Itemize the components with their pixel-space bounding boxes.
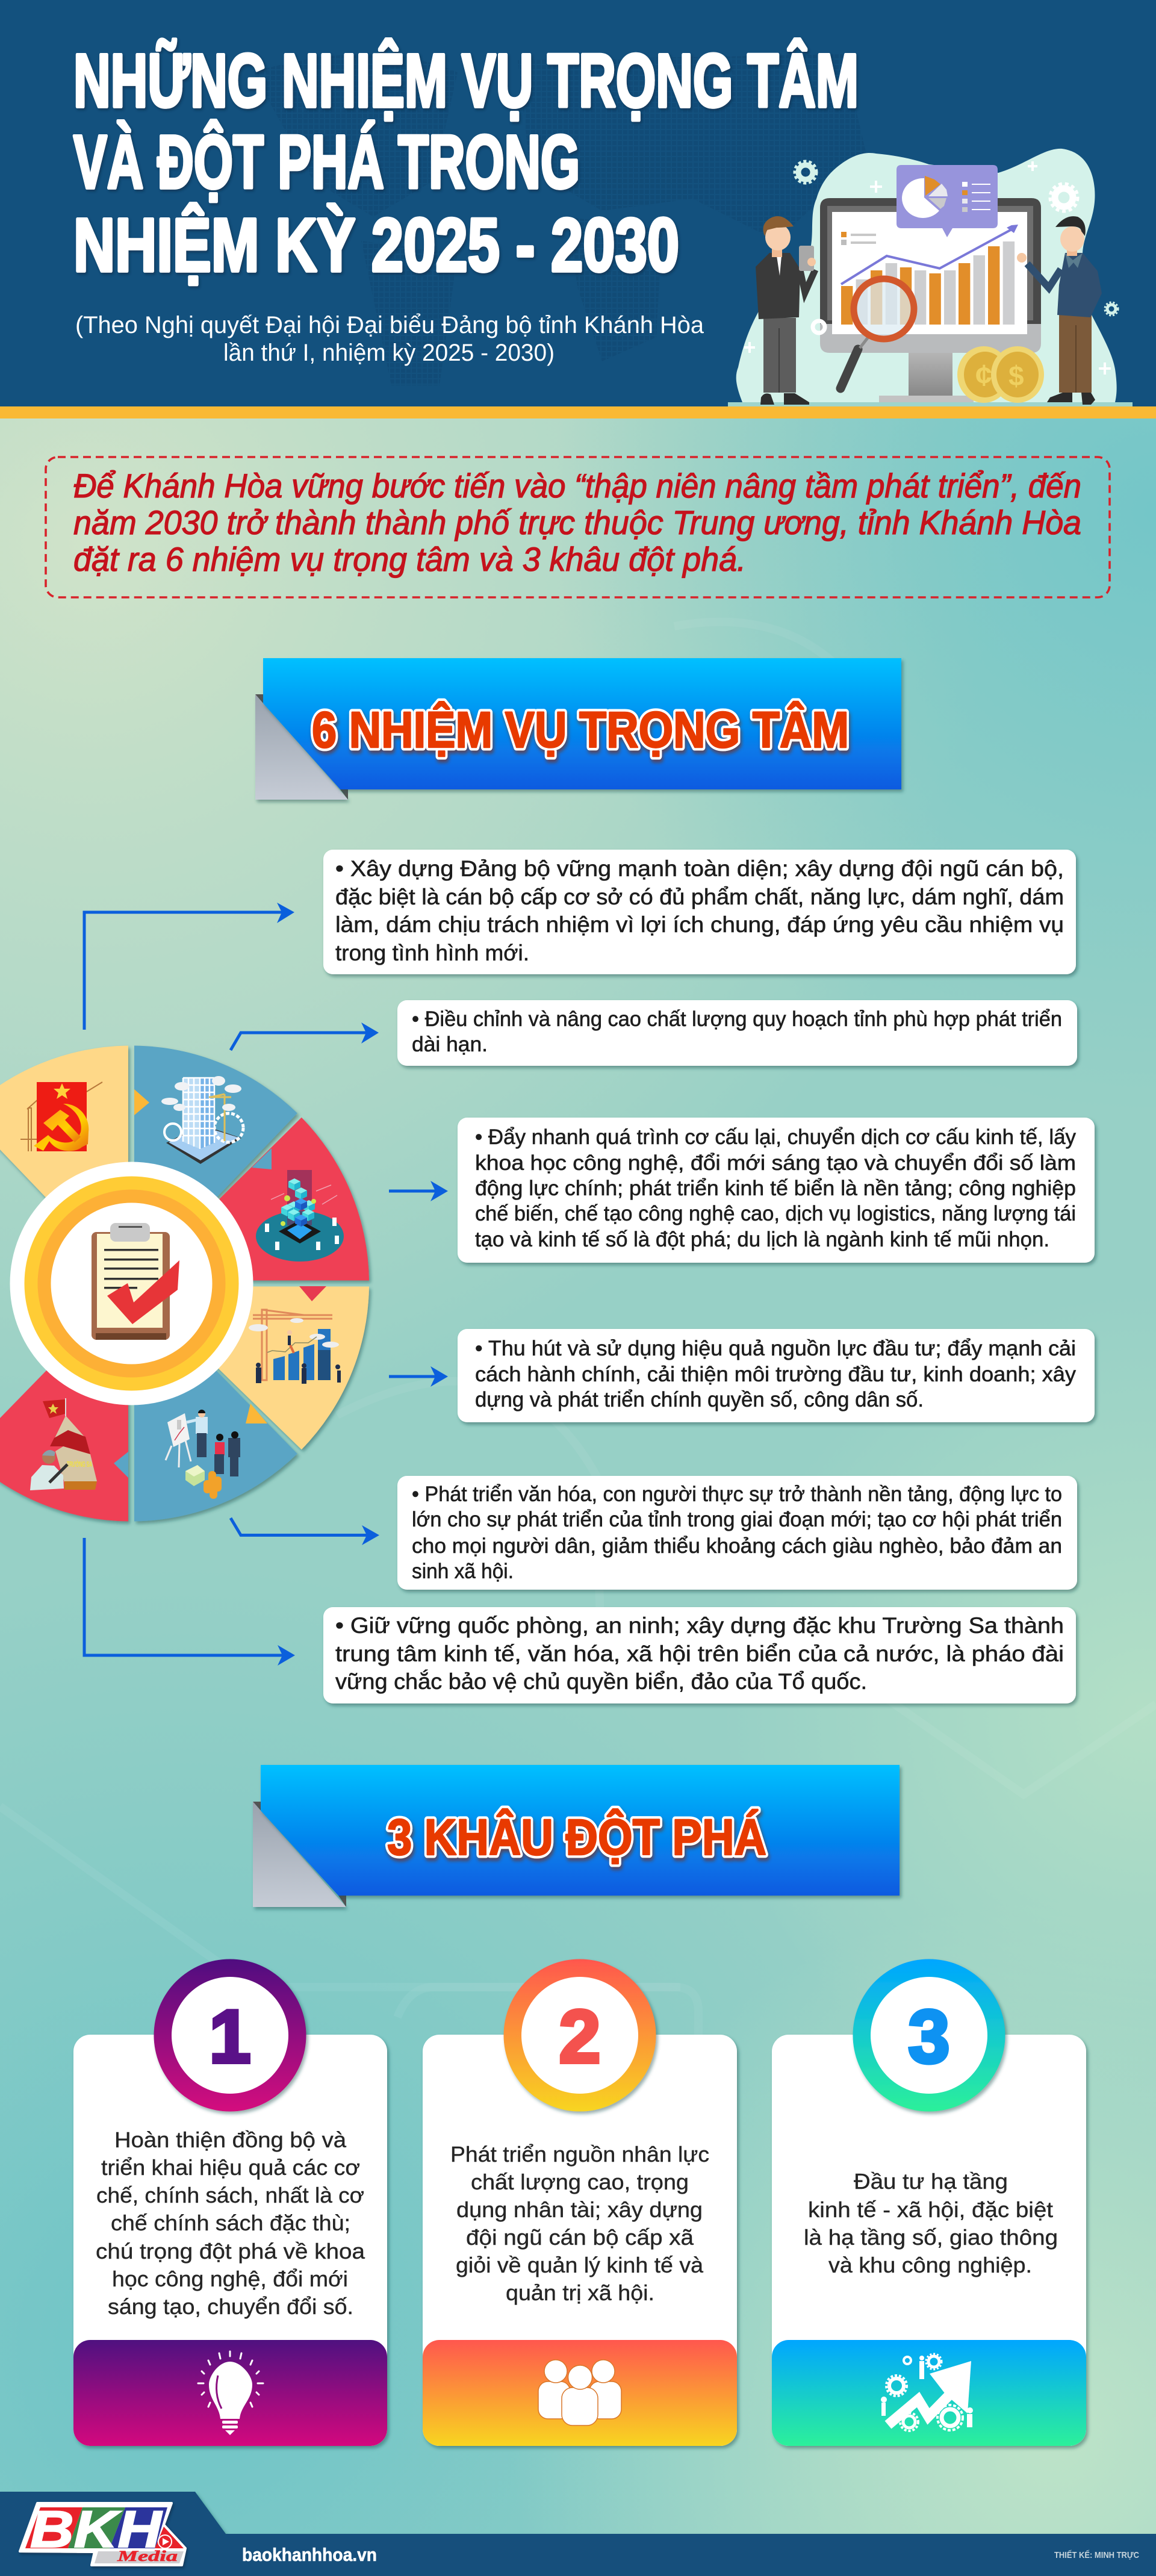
card 2	[423, 1959, 737, 2446]
sector: defence	[0, 1286, 128, 1521]
card 1 text: triển khai hiệu quả các cơ	[101, 2155, 360, 2180]
website: baokhanhhoa.vn	[242, 2544, 377, 2565]
text box 6: trung tâm kinh tế, văn hóa, xã hội trên biển của cả nước, là pháo đài	[335, 1641, 1064, 1666]
card 1 text: Hoàn thiện đồng bộ và	[114, 2127, 347, 2152]
connector arrow 5	[231, 1518, 379, 1545]
text box 2: • Điều chỉnh và nâng cao chất lượng quy hoạch tỉnh phù hợp phát triển	[412, 1007, 1062, 1031]
card 2 text: quản trị xã hội.	[506, 2280, 654, 2305]
monitor	[820, 198, 1041, 402]
decorative plus signs	[744, 161, 1111, 375]
icon: light bulb	[198, 2351, 263, 2435]
text box 1: làm, dám chịu trách nhiệm vì lợi ích chung, đáp ứng yêu cầu nhiệm vụ	[335, 912, 1064, 937]
connector arrow 3	[389, 1181, 448, 1201]
text box 5: lớn cho sự phát triển của tỉnh trong giai đoạn mới; tạo cơ hội phát triển	[412, 1508, 1062, 1531]
connector arrow 2	[231, 1022, 379, 1050]
man pointing	[1017, 216, 1102, 405]
text box 3: tạo và kinh tế số là đột phá; du lịch là ngành kinh tế mũi nhọn.	[475, 1228, 1049, 1251]
heading banner: 6 nhiệm vụ trọng tâm: 6 NHIỆM VỤ TRỌNG TÂM	[312, 702, 849, 758]
title	[73, 39, 859, 287]
number badge 2	[503, 1959, 656, 2111]
subtitle: (Theo Nghị quyết Đại hội Đại biểu Đảng bộ tỉnh Khánh Hòa	[75, 312, 704, 338]
text box 4: dựng và phát triển chính quyền số, công dân số.	[475, 1388, 924, 1411]
text box 6: • Giữ vững quốc phòng, an ninh; xây dựng đặc khu Trường Sa thành	[335, 1613, 1064, 1638]
number badge 1: 1	[210, 1996, 250, 2079]
footer	[0, 2492, 1156, 2576]
text box 2: dài hạn.	[412, 1033, 488, 1056]
icon: group of people	[538, 2360, 621, 2425]
decorative gears	[795, 161, 1118, 333]
text box 5	[397, 1476, 1077, 1590]
icon: digital chip platform	[256, 1170, 344, 1262]
card 1 text: chế chính sách đặc thù;	[111, 2210, 350, 2235]
card 2 text: chất lượng cao, trọng	[471, 2170, 689, 2194]
world map texture	[253, 54, 867, 385]
text box 5: cho mọi người dân, giảm thiểu khoảng cách giàu nghèo, bảo đảm an	[412, 1534, 1062, 1558]
text box 4: • Thu hút và sử dụng hiệu quả nguồn lực đầu tư; đẩy mạnh cải	[475, 1337, 1076, 1360]
connector arrow 6	[84, 1538, 295, 1666]
designer credit: THIẾT KẾ: MINH TRỰC	[1054, 2550, 1139, 2560]
text box 3: khoa học công nghệ, đổi mới sáng tạo và chuyển đổi số làm	[475, 1151, 1076, 1175]
text box 4	[458, 1329, 1095, 1422]
card 1 text	[96, 2127, 365, 2319]
text box 4: cách hành chính, cải thiện môi trường đầu tư, kinh doanh; xây	[475, 1363, 1077, 1386]
sector: investment	[134, 1286, 369, 1449]
text box 2	[397, 1000, 1077, 1066]
number badge 3: 3	[909, 1996, 949, 2079]
title: VÀ ĐỘT PHÁ TRONG	[73, 120, 580, 204]
text box 1: đặc biệt là cán bộ cấp cơ sở có đủ phẩm chất, năng lực, dám nghĩ, dám	[335, 885, 1064, 909]
text box 5: sinh xã hội.	[412, 1560, 514, 1583]
header panel	[0, 0, 1156, 406]
sector: party	[0, 1045, 128, 1284]
intro callout	[46, 457, 1110, 597]
connector arrow 4	[389, 1366, 448, 1387]
icon: Truong Sa monument with sailor: TRƯỜNG SA	[67, 1460, 92, 1469]
text box 1: trong tình hình mới.	[335, 941, 529, 965]
wheel diagram: six tasks	[0, 1045, 369, 1521]
heading banner: 6 nhiệm vụ trọng tâm	[255, 658, 901, 800]
card 3 text: kinh tế - xã hội, đặc biệt	[808, 2197, 1053, 2222]
card 1 text: sáng tạo, chuyển đổi số.	[108, 2294, 353, 2319]
intro callout: đặt ra 6 nhiệm vụ trọng tâm và 3 khâu đột phá.	[73, 540, 746, 578]
gold coins: ¢	[975, 358, 992, 392]
text box 3: động lực chính; phát triển kinh tế biển là nền tảng; công nghiệp	[475, 1177, 1076, 1200]
text box 6	[323, 1607, 1076, 1703]
icon: clipboard with check mark	[92, 1223, 179, 1340]
card 3 text: là hạ tầng số, giao thông	[804, 2225, 1058, 2250]
heading banner: 3 khâu đột phá: 3 KHÂU ĐỘT PHÁ	[387, 1809, 766, 1865]
sector: planning	[134, 1045, 297, 1284]
connector arrow 1	[84, 903, 294, 1030]
card 3 text: Đầu tư hạ tầng	[854, 2169, 1008, 2194]
speech bubble with pie chart	[897, 165, 998, 237]
intro callout: Để Khánh Hòa vững bước tiến vào “thập niên nâng tầm phát triển”, đến	[73, 467, 1081, 505]
icon: Truong Sa monument with sailor	[30, 1398, 97, 1490]
subtitle: lần thứ I, nhiệm kỳ 2025 - 2030)	[223, 340, 555, 366]
man with phone	[756, 216, 816, 405]
card 1 text: học công nghệ, đổi mới	[112, 2266, 348, 2291]
icon: tower under construction	[161, 1076, 243, 1164]
title: NHIỆM KỲ 2025 - 2030	[73, 204, 679, 287]
sector: culture and people	[134, 1286, 297, 1521]
card 3 footer with growth icon	[772, 2340, 1086, 2446]
card 1 text: chú trọng đột phá về khoa	[96, 2239, 365, 2263]
icon: team around flipchart with money	[166, 1410, 240, 1499]
bar chart	[841, 225, 1018, 325]
card 1	[73, 1959, 387, 2446]
text box 1	[323, 850, 1076, 974]
subtitle	[75, 312, 704, 366]
card 3 text: và khu công nghiệp.	[828, 2253, 1032, 2277]
card 1 footer with light bulb icon	[73, 2340, 387, 2446]
card 2 text	[450, 2142, 709, 2305]
text box 3: chế biến, chế tạo công nghệ cao, dịch vụ logistics, năng lượng tái	[475, 1202, 1076, 1225]
text box 3	[458, 1118, 1095, 1263]
card 2 footer with people icon	[423, 2340, 737, 2446]
icon: gears and rising arrow	[881, 2354, 973, 2431]
heading banner: 6 nhiệm vụ trọng tâm: 6 NHIỆM VỤ TRỌNG TÂM	[312, 702, 849, 758]
center emblem	[10, 1162, 253, 1405]
illustration: analysts with chart on monitor	[728, 149, 1133, 406]
sector: economy	[134, 1118, 369, 1284]
icon: construction with rising bars	[249, 1310, 341, 1384]
card 2 text: dụng nhân tài; xây dựng	[456, 2197, 703, 2222]
intro callout: năm 2030 trở thành thành phố trực thuộc Trung ương, tỉnh Khánh Hòa	[73, 503, 1081, 541]
card 3 text	[804, 2169, 1058, 2277]
card 3	[772, 1959, 1086, 2446]
text box 5: • Phát triển văn hóa, con người thực sự trở thành nền tảng, động lực to	[412, 1482, 1062, 1506]
logo: Media	[116, 2548, 178, 2565]
text box 6: vững chắc bảo vệ chủ quyền biển, đảo của Tổ quốc.	[335, 1669, 867, 1694]
text box 1: • Xây dựng Đảng bộ vững mạnh toàn diện; xây dựng đội ngũ cán bộ,	[335, 856, 1064, 881]
card 1 text: chế, chính sách, nhất là cơ	[96, 2183, 364, 2207]
heading banner: 3 khâu đột phá	[253, 1765, 900, 1907]
card 2 text: giỏi về quản lý kinh tế và	[456, 2253, 704, 2277]
icon: party flag with hammer and sickle	[20, 1082, 102, 1151]
magnifying glass	[841, 279, 914, 388]
number badge 3	[853, 1959, 1005, 2111]
text box 3: • Đẩy nhanh quá trình cơ cấu lại, chuyển dịch cơ cấu kinh tế, lấy	[475, 1125, 1076, 1149]
number badge 1	[154, 1959, 306, 2111]
yellow header band	[0, 406, 1156, 418]
card 2 text: đội ngũ cán bộ cấp xã	[466, 2225, 694, 2250]
heading banner: 3 khâu đột phá: 3 KHÂU ĐỘT PHÁ	[387, 1809, 766, 1865]
number badge 2: 2	[559, 1996, 600, 2079]
logo: BKH	[30, 2501, 163, 2559]
blob backdrop	[736, 149, 1117, 402]
gold coins	[957, 346, 1044, 403]
card 2 text: Phát triển nguồn nhân lực	[450, 2142, 709, 2167]
gold coins: $	[1008, 360, 1024, 391]
logo	[20, 2501, 185, 2565]
